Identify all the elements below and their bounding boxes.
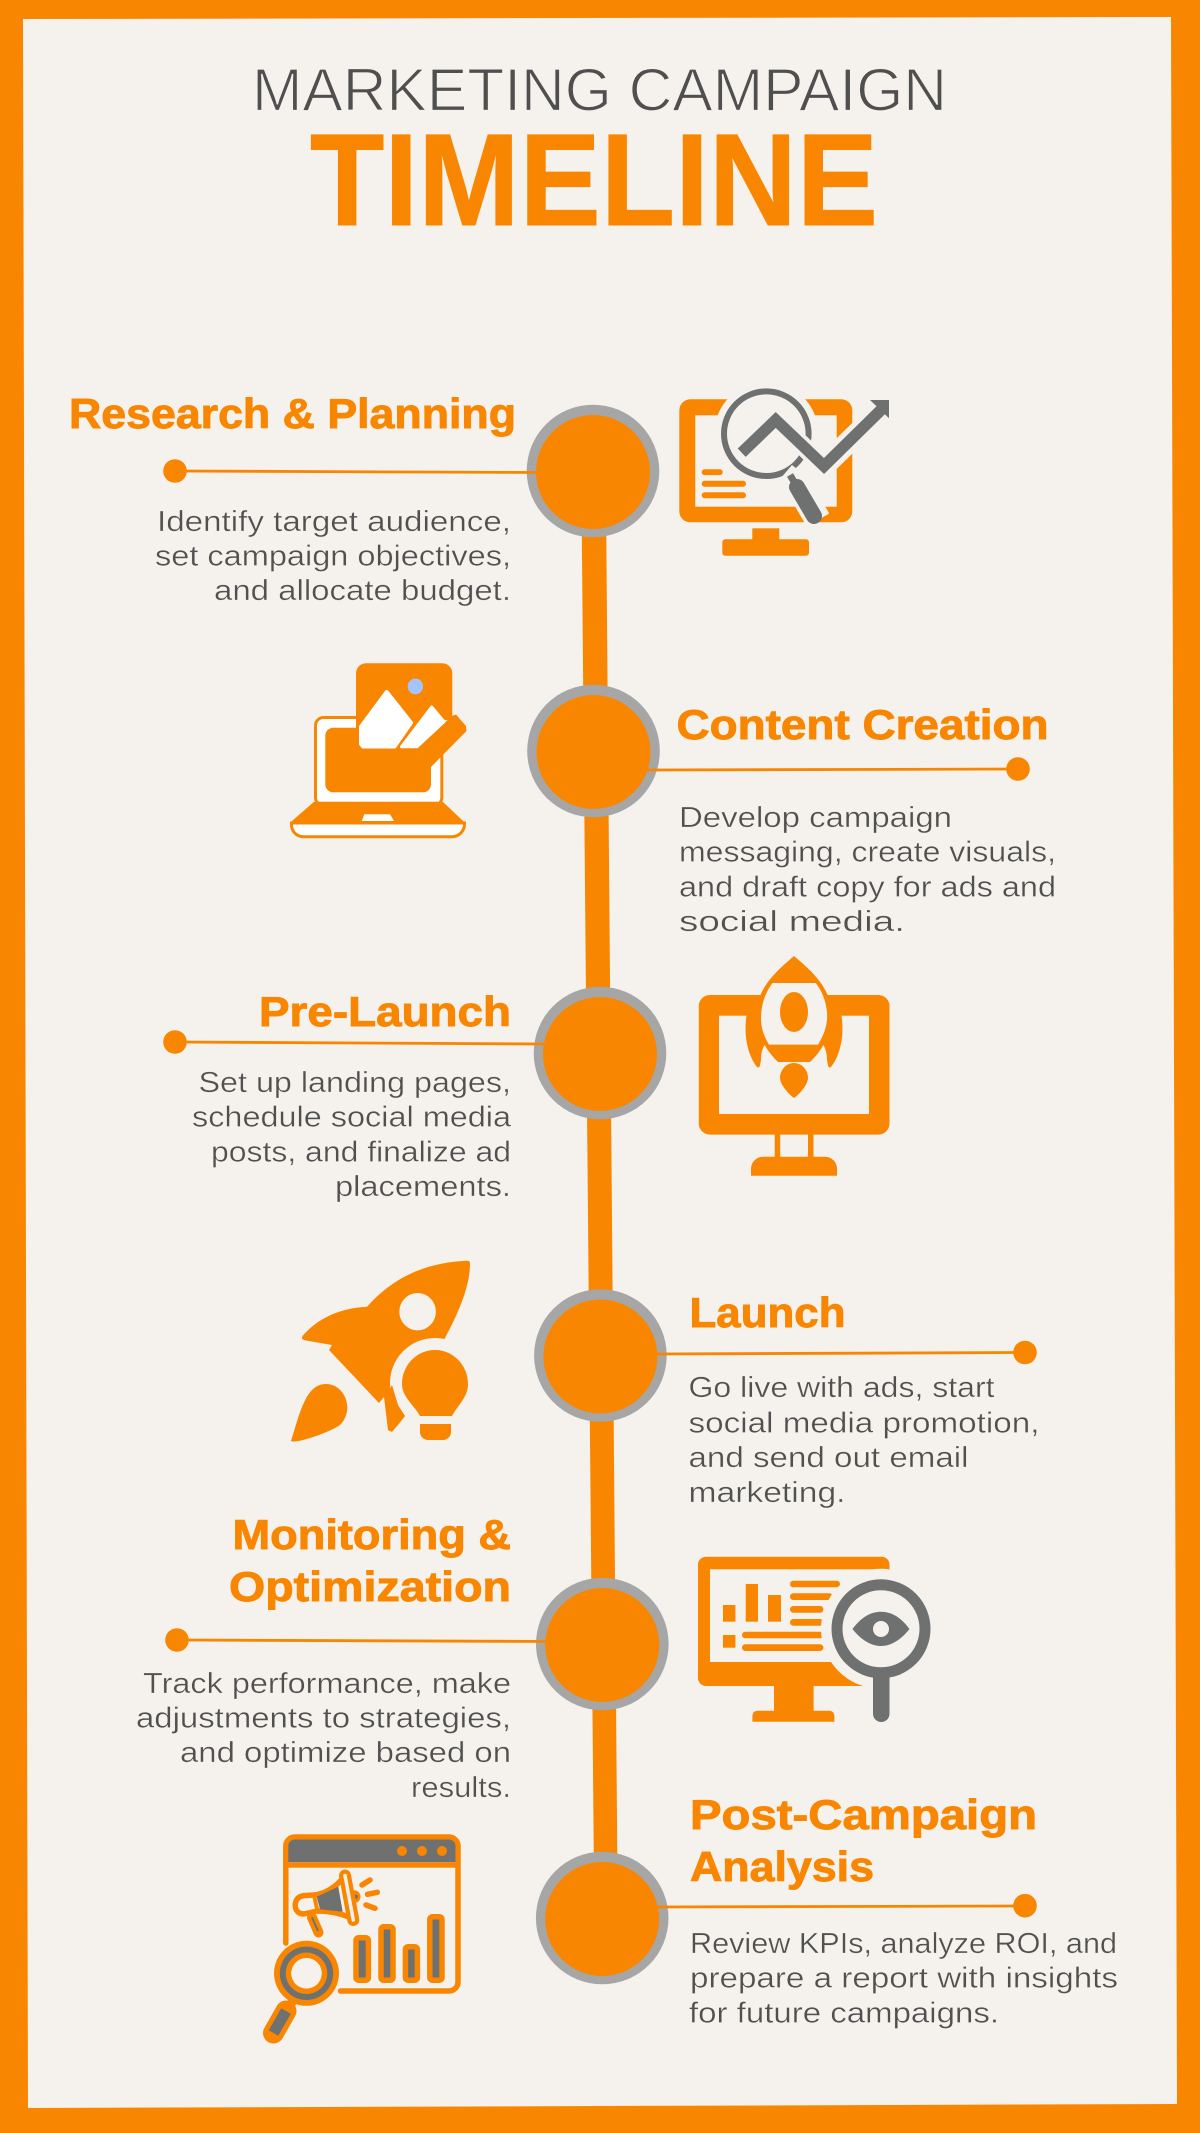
description [192, 1067, 512, 1203]
description: placements. [335, 1171, 511, 1203]
heading: Post-Campaign [690, 1791, 1037, 1838]
description [136, 1668, 511, 1804]
icon: dashboard monitor with eye magnifier [698, 1557, 941, 1722]
panel: step 5 monitoring and optimization [136, 1511, 941, 1804]
description: and optimize based on [180, 1737, 511, 1769]
timeline node [536, 1852, 668, 1984]
description: prepare a report with insights [690, 1962, 1118, 1994]
heading: Pre-Launch [259, 988, 511, 1035]
description: and draft copy for ads and [679, 872, 1056, 904]
description: and allocate budget. [214, 575, 511, 607]
panel: step 3 pre-launch [163, 956, 889, 1203]
description: and send out email [688, 1442, 968, 1474]
description: messaging, create visuals, [679, 836, 1056, 868]
description: for future campaigns. [689, 1998, 999, 2030]
description [155, 506, 511, 607]
connector line [163, 1030, 547, 1054]
description [689, 1928, 1118, 2030]
description: Identify target audience, [157, 506, 511, 538]
timeline node [527, 405, 659, 537]
description: marketing. [688, 1477, 846, 1509]
panel: step 6 post-campaign analysis [274, 1791, 1118, 2033]
description [688, 1372, 1040, 1509]
connector line [645, 757, 1030, 781]
heading [690, 1791, 1037, 1890]
title [252, 56, 947, 253]
heading [229, 1511, 511, 1610]
connector line [652, 1341, 1037, 1364]
heading: Analysis [690, 1843, 874, 1890]
heading: Monitoring & [232, 1511, 511, 1558]
timeline node [527, 685, 660, 817]
description: schedule social media [192, 1102, 512, 1134]
connector line [652, 1894, 1037, 1917]
heading: Content Creation [676, 701, 1048, 748]
heading: Launch [690, 1289, 846, 1336]
title line: timeline: TIMELINE [310, 106, 878, 253]
description: Set up landing pages, [198, 1067, 511, 1099]
description: social media promotion, [688, 1408, 1040, 1440]
panel: step 2 content creation [290, 663, 1056, 938]
panel: step 4 launch [291, 1261, 1040, 1509]
icon: browser window with megaphone, bars and magnifier [274, 1837, 458, 2033]
icon: monitor with magnifier and rising arrow [679, 382, 889, 556]
panel: step 1 research and planning [69, 382, 889, 607]
connector line [163, 459, 540, 483]
description: adjustments to strategies, [136, 1702, 511, 1734]
description: set campaign objectives, [155, 540, 511, 572]
icon: laptop with image card [290, 663, 466, 837]
timeline node [536, 1578, 669, 1710]
description: results. [411, 1772, 511, 1804]
description: Review KPIs, analyze ROI, and [690, 1928, 1117, 1960]
description: Track performance, make [143, 1668, 511, 1700]
description: Develop campaign [679, 802, 952, 834]
icon: monitor with rocket [699, 956, 890, 1176]
description: social media. [679, 906, 905, 938]
connector line [165, 1628, 550, 1652]
heading: Optimization [229, 1563, 511, 1610]
description: Go live with ads, start [688, 1372, 994, 1404]
timeline spine [582, 500, 618, 1880]
description: posts, and finalize ad [211, 1136, 511, 1168]
title line: marketing campaign: MARKETING CAMPAIGN [252, 56, 947, 124]
icon: rocket and light bulb [291, 1261, 480, 1441]
heading: Research & Planning [69, 390, 516, 437]
timeline node [534, 1289, 667, 1422]
description [679, 802, 1056, 938]
timeline node [534, 987, 666, 1119]
